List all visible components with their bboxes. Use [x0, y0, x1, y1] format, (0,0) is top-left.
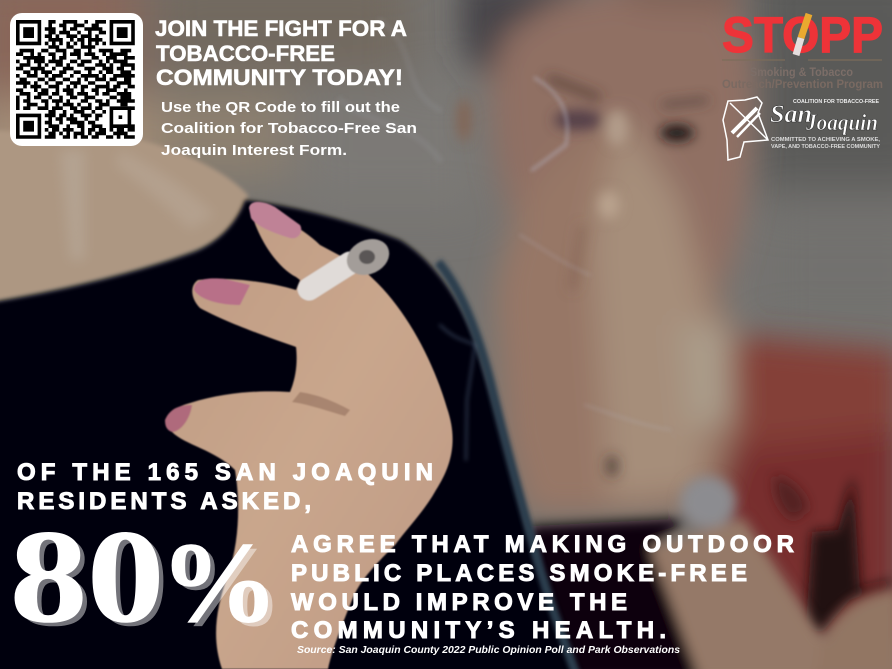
stat shadow: 80 [15, 508, 169, 655]
Coalition for Tobacco-Free San Joaquin logo: Joaquin [805, 110, 878, 135]
statistic description [291, 531, 794, 644]
call to action heading: COMMUNITY TODAY! [156, 65, 403, 90]
survey intro text: OF THE 165 SAN JOAQUIN [17, 459, 433, 486]
survey intro text [17, 459, 433, 515]
STOPP logo [722, 7, 883, 91]
blurred person: face, hands, shirt [460, 0, 892, 640]
QR instructions text: Coalition for Tobacco-Free San [161, 120, 417, 137]
nails [249, 202, 301, 238]
stat foreground: % [160, 520, 279, 646]
blurred backdrop: wall, hair and shirt [0, 0, 892, 330]
Coalition for Tobacco-Free San Joaquin logo: San [770, 101, 812, 128]
QR instructions text: Joaquin Interest Form. [161, 142, 347, 159]
stat shadow: % [165, 524, 284, 650]
icon: county outline with crossed cigarettes [723, 97, 768, 160]
statistic description: WOULD IMPROVE THE [291, 589, 627, 616]
QR instructions text [161, 99, 417, 159]
STOPP logo: Smoking & Tobacco [750, 67, 853, 79]
dark sleeve, forearms and watch [530, 476, 892, 669]
statistic description: PUBLIC PLACES SMOKE-FREE [291, 560, 747, 587]
blurred facial features and fingertips [457, 78, 708, 477]
call to action heading: JOIN THE FIGHT FOR A [155, 16, 407, 41]
Coalition for Tobacco-Free San Joaquin logo: COMMITTED TO ACHIEVING A SMOKE, [771, 137, 880, 143]
QR instructions text: Use the QR Code to fill out the [161, 99, 400, 116]
QR code card [10, 13, 143, 146]
foreground hand holding cigarette [165, 202, 453, 669]
icon: cigarette slash [796, 14, 809, 55]
STOPP logo: Outreach/Prevention Program [722, 79, 883, 91]
statistic description: COMMUNITY’S HEALTH. [291, 617, 666, 644]
blonde hair top left [0, 130, 248, 302]
cigarette [309, 263, 350, 289]
survey intro text: RESIDENTS ASKED, [17, 488, 311, 515]
STOPP logo: STOPP [722, 7, 883, 63]
Coalition for Tobacco-Free San Joaquin logo: COALITION FOR TOBACCO-FREE [793, 99, 879, 105]
QR code modules [16, 22, 135, 137]
call to action heading [155, 16, 407, 90]
dark jacket of smoker [0, 200, 578, 669]
smoke wisps [340, 20, 670, 460]
Coalition for Tobacco-Free San Joaquin logo: VAPE, AND TOBACCO-FREE COMMUNITY [771, 144, 880, 150]
Coalition for Tobacco-Free San Joaquin logo [723, 97, 880, 160]
stat foreground: 80 [10, 504, 164, 651]
shirt folds [774, 475, 892, 635]
call to action heading: TOBACCO-FREE [156, 41, 335, 66]
stat foreground [10, 504, 279, 651]
statistic description: AGREE THAT MAKING OUTDOOR [291, 531, 794, 558]
stat shadow [15, 508, 284, 655]
source note: Source: San Joaquin County 2022 Public Opinion Poll and Park Observations [297, 645, 680, 656]
big statistic 80% [10, 504, 284, 655]
